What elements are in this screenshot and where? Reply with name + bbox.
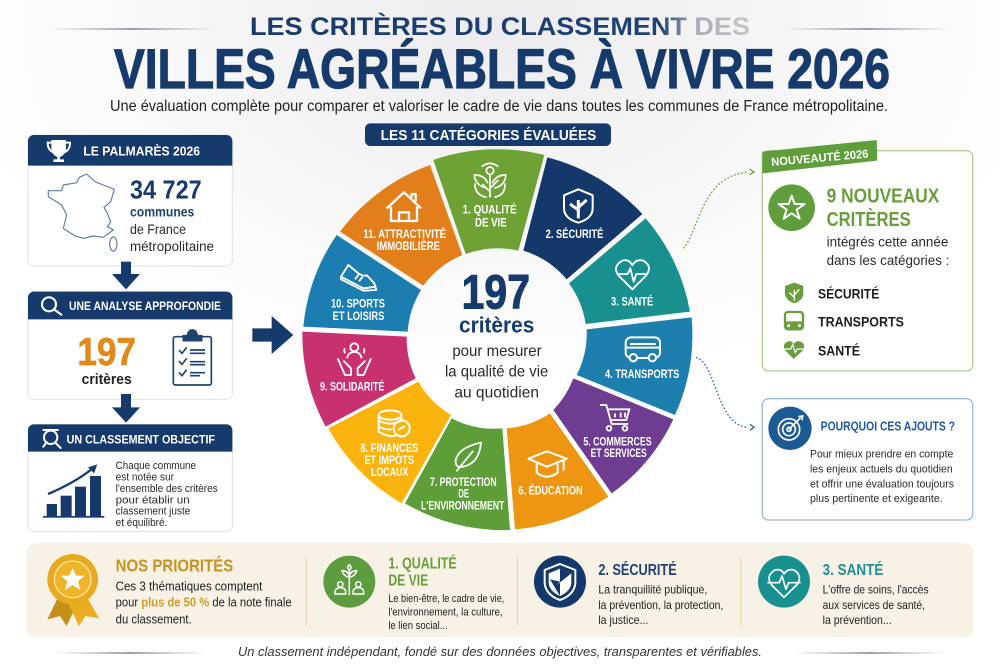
heading: 9 nouveaux critères: 9 NOUVEAUX (827, 184, 940, 207)
text block: Pour mieux prendre en compte (810, 449, 953, 461)
segment 8: finances et impôts locaux: ET IMPÔTS (364, 452, 414, 467)
segment 8: finances et impôts locaux: LOCAUX (371, 465, 408, 479)
icon: coins (379, 410, 410, 436)
segment 1: qualité de vie: DE VIE (475, 216, 507, 230)
segment 11: attractivité immobilière: IMMOBILIÈRE (377, 238, 440, 253)
panel heading: UN CLASSEMENT OBJECTIF (67, 432, 215, 446)
segment 6: éducation (507, 413, 608, 529)
wheel centre: 197 critères: pour mesurer (452, 343, 542, 360)
icon: trophy (48, 141, 70, 161)
subtitle: Une évaluation complète pour comparer et valoriser le cadre de vie dans toutes les communes de France métropolitaine. (110, 98, 888, 115)
arrow: right to wheel (252, 316, 293, 354)
priority 1: qualité de vie: le lien social... (388, 620, 448, 632)
priority 3: santé (758, 556, 929, 627)
text block (116, 580, 292, 626)
heading: 9 nouveaux critères: CRITÈRES (827, 208, 911, 231)
wheel: 11 categories (302, 123, 692, 530)
list item: transports (785, 312, 904, 330)
arrow: down (112, 394, 140, 423)
text block (827, 234, 949, 268)
icon: target (768, 407, 812, 450)
priority 2: sécurité: la prévention, la protection, (598, 599, 723, 612)
wheel centre: 197 critères: la qualité de vie (445, 364, 548, 381)
list item: santé: SANTÉ (818, 343, 860, 359)
wheel centre: 197 critères: au quotidien (454, 384, 539, 401)
priority 1: qualité de vie: DE VIE (388, 573, 428, 590)
priority 2: sécurité (534, 556, 723, 627)
heading: nos priorités: NOS PRIORITÉS (116, 555, 233, 576)
segment 5: commerces et services: 5. COMMERCES (583, 434, 652, 448)
list item: sécurité: SÉCURITÉ (818, 285, 879, 301)
badge: les 11 catégories évaluées: LES 11 CATÉGORIES ÉVALUÉES (381, 127, 597, 144)
text block: explanation: pour établir un (116, 494, 190, 506)
icon: plant and people (323, 556, 375, 608)
icon: heart (758, 556, 810, 608)
text block: les enjeux actuels du quotidien (810, 463, 953, 475)
text block: dans les catégories : (827, 252, 949, 268)
priority 1: qualité de vie (323, 555, 504, 632)
stat: 197 critères: 197 (77, 330, 136, 374)
priority 3: santé: 3. SANTÉ (823, 562, 883, 579)
icon: heart (616, 260, 649, 289)
segment 8: finances et impôts locaux: 8. FINANCES (360, 441, 418, 455)
segment 1: qualité de vie (433, 149, 544, 254)
icon: bus (626, 337, 660, 361)
icon: map of France (48, 174, 117, 251)
panel: un classement objectif (28, 424, 232, 532)
arrow: dotted green (683, 169, 754, 248)
priority 2: sécurité: la justice... (598, 614, 648, 627)
panel: nouveauté 2026 (762, 140, 973, 371)
wheel centre: 197 critères (445, 265, 548, 401)
text block: explanation: est notée sur (116, 472, 174, 484)
segment 11: attractivité immobilière: 11. ATTRACTIVITÉ (363, 226, 446, 241)
title: les critères du classement des: LES CRITÈRES DU CLASSEMENT DES (250, 12, 750, 41)
segment 7: protection de l'environnement: DE (458, 487, 469, 501)
priority 2: sécurité: La tranquillité publique, (598, 583, 707, 596)
segment 11: attractivité immobilière (340, 165, 462, 286)
icon: house (387, 192, 421, 221)
segment 7: protection de l'environnement: 7. PROTECTION (430, 475, 497, 489)
icon: star (768, 184, 815, 231)
list item: santé (784, 341, 860, 359)
arrow: down (112, 262, 140, 289)
icon: magnifier with person (43, 430, 61, 448)
stat: 34 727 communes: métropolitaine (130, 238, 214, 254)
icon: leaf (456, 443, 481, 471)
heading: pourquoi ces ajouts: POURQUOI CES AJOUTS ? (821, 419, 955, 434)
panel: une analyse approfondie (28, 292, 232, 399)
text block: explanation (116, 460, 218, 529)
segment 7: protection de l'environnement (405, 418, 510, 530)
segment 9: solidarité: 9. SOLIDARITÉ (320, 379, 384, 394)
stat: 197 critères: critères (82, 372, 132, 388)
segment 2: sécurité: 2. SÉCURITÉ (546, 226, 603, 241)
footer note: Un classement indépendant, fondé sur des données objectives, transparentes et vérifiables. (238, 644, 762, 659)
segment 10: sports et loisirs: ET LOISIRS (333, 309, 384, 323)
icon: cart (600, 405, 629, 431)
segment 7: protection de l'environnement: L'ENVIRONNEMENT (421, 498, 505, 512)
segment 3: santé (569, 218, 690, 324)
stat: 34 727 communes: de France (130, 221, 186, 237)
priority 3: santé: L'offre de soins, l'accès (823, 583, 929, 596)
tag: nouveauté 2026: NOUVEAUTÉ 2026 (771, 148, 869, 169)
segment 3: santé: 3. SANTÉ (611, 293, 653, 308)
text block: et offrir une évaluation toujours (810, 478, 954, 490)
stat: 34 727 communes (130, 174, 214, 254)
stat: 197 critères (77, 330, 136, 388)
chart icon: rising bars (43, 464, 104, 518)
panel: pourquoi ces ajouts (762, 399, 973, 520)
icon: graduation cap (528, 451, 567, 477)
text block: intégrés cette année (827, 234, 949, 250)
text block: plus pertinente et exigeante. (810, 493, 943, 505)
badge: les 11 catégories évaluées (365, 123, 611, 146)
text block: pour plus de 50 % de la note finale (116, 596, 292, 610)
priority 3: santé: aux services de santé, (823, 599, 925, 612)
icon: medal (47, 554, 99, 626)
segment 8: finances et impôts locaux (328, 382, 451, 503)
text block: explanation: Chaque commune (116, 460, 196, 472)
text block: du classement. (116, 612, 192, 626)
panel heading: UNE ANALYSE APPROFONDIE (69, 299, 221, 313)
segment 4: transports (577, 317, 692, 415)
icon: magnifier (42, 297, 61, 315)
arrow: dotted blue (696, 357, 754, 430)
panel: nos priorités (27, 543, 973, 637)
segment 2: sécurité (523, 157, 642, 279)
stat: 34 727 communes: communes (130, 204, 195, 220)
priority 1: qualité de vie: l'environnement, la culture, (388, 607, 503, 619)
icon: plant (474, 163, 506, 197)
icon: shield (534, 556, 586, 608)
right column (683, 140, 973, 520)
segment 4: transports: 4. TRANSPORTS (605, 367, 679, 381)
heading: 9 nouveaux critères (827, 184, 940, 231)
text block: Ces 3 thématiques comptent (116, 580, 263, 594)
priority 1: qualité de vie: 1. QUALITÉ (388, 555, 457, 572)
segment 1: qualité de vie: 1. QUALITÉ (463, 201, 517, 216)
segment 10: sports et loisirs: 10. SPORTS (331, 296, 385, 310)
segment 6: éducation: 6. ÉDUCATION (518, 483, 583, 498)
icon: shield (564, 189, 593, 223)
priority 3: santé: la prévention... (823, 614, 892, 627)
priority 2: sécurité: 2. SÉCURITÉ (598, 562, 677, 579)
tag: nouveauté 2026 (762, 140, 877, 173)
panel: le palmarès 2026 (28, 135, 232, 266)
stat: 34 727 communes: 34 727 (130, 174, 202, 204)
icon: clipboard (173, 330, 211, 385)
left column (28, 135, 293, 532)
list item: sécurité (785, 283, 879, 303)
text block: explanation: et équilibré. (116, 517, 167, 529)
segment 5: commerces et services: ET SERVICES (591, 446, 647, 460)
icon: hands and person (338, 343, 371, 375)
text block: explanation: l'ensemble des critères (116, 483, 218, 495)
segment 9: solidarité (302, 332, 416, 427)
wheel centre: 197 critères: 197 (462, 265, 530, 319)
segment 5: commerces et services (553, 378, 673, 493)
list item: transports: TRANSPORTS (818, 314, 904, 330)
text block: explanation: classement juste (116, 506, 190, 518)
text block (810, 449, 954, 505)
icon: running shoe (341, 265, 376, 291)
priority 1: qualité de vie: Le bien-être, le cadre de vie, (388, 593, 504, 605)
panel heading: LE PALMARÈS 2026 (83, 144, 200, 159)
segment 10: sports et loisirs (303, 235, 421, 332)
wheel centre: 197 critères: critères (459, 312, 534, 337)
